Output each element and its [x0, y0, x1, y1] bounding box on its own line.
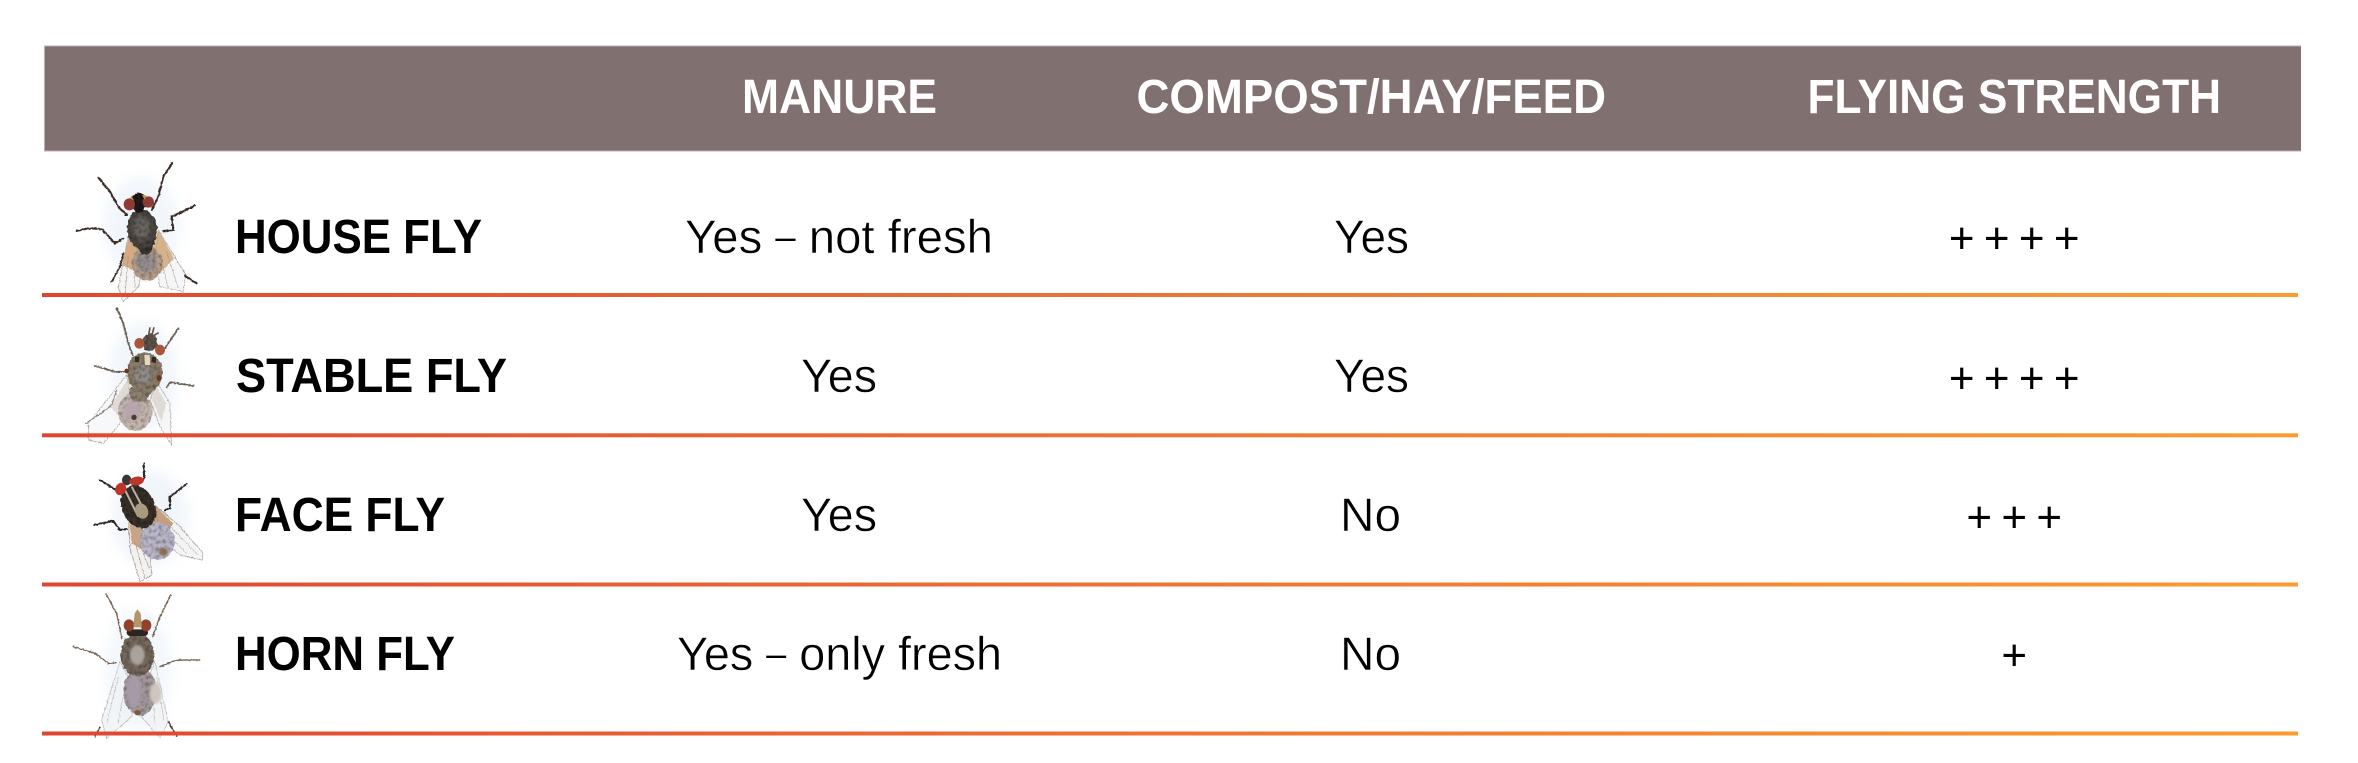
row: horn fly: [42, 594, 2298, 738]
rule: [42, 293, 2298, 297]
cell: compost: No: [1340, 488, 1401, 541]
cell: compost: Yes: [1334, 349, 1409, 402]
row: stable fly: [42, 308, 2298, 445]
icon: stable fly: [86, 308, 193, 445]
icon: horn fly: [73, 594, 200, 738]
row: face fly: [42, 463, 2298, 586]
cell: manure: only fresh: [786, 627, 1002, 680]
rule: [42, 732, 2298, 736]
name: face fly: FACE FLY: [235, 489, 445, 542]
cell: manure: Yes: [801, 488, 877, 541]
cell: flying strength: +: [2001, 631, 2027, 680]
icon: house fly: [77, 163, 197, 315]
header bar: [44, 46, 2301, 152]
name: stable fly: STABLE FLY: [236, 350, 507, 403]
cell: flying strength: + + + +: [1949, 354, 2080, 403]
header: flying strength: FLYING STRENGTH: [1808, 71, 2221, 124]
icon: face fly: [94, 463, 203, 582]
cell: manure: Yes: [677, 627, 754, 680]
cell: compost: Yes: [1334, 210, 1409, 263]
name: house fly: HOUSE FLY: [235, 211, 482, 264]
cell: manure: –: [775, 216, 796, 257]
cell: manure: Yes: [685, 210, 762, 263]
cell: manure: Yes: [801, 349, 877, 402]
row: house fly: [42, 163, 2298, 315]
cell: flying strength: + + + +: [1949, 214, 2080, 263]
name: horn fly: HORN FLY: [235, 628, 455, 681]
rule: [42, 433, 2298, 437]
cell: flying strength: + + +: [1966, 493, 2062, 542]
cell: compost: No: [1340, 627, 1401, 680]
rule: [42, 582, 2298, 586]
header: compost/hay/feed: COMPOST/HAY/FEED: [1136, 71, 1606, 124]
cell: manure: –: [766, 633, 786, 674]
cell: manure: not fresh: [796, 210, 993, 263]
header: manure: MANURE: [742, 71, 937, 124]
